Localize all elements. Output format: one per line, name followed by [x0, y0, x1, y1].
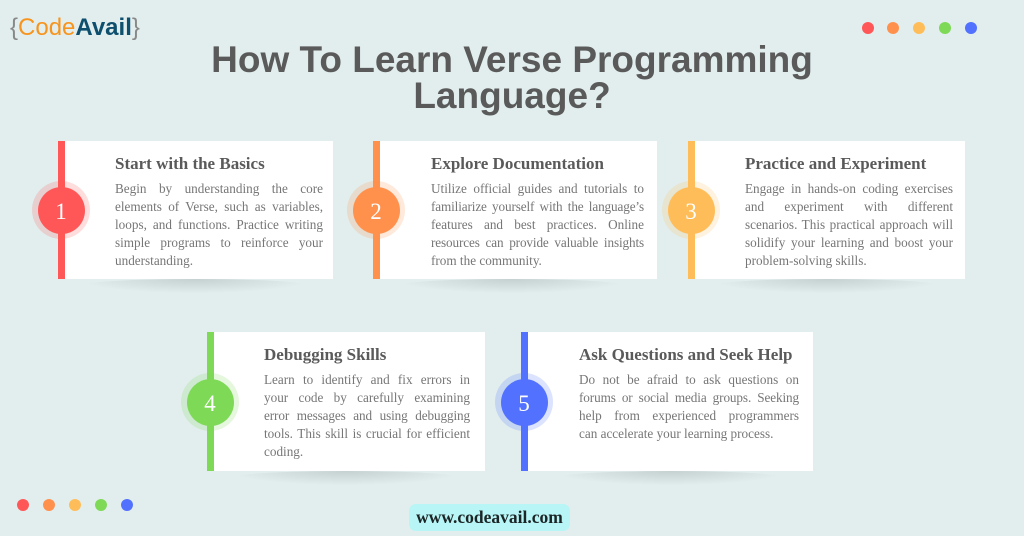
text: Utilize official guides and tutorials to	[431, 181, 644, 196]
heading: Start with the Basics	[115, 154, 265, 173]
text: can accelerate your learning process.	[579, 426, 773, 441]
number 5: 5	[518, 390, 530, 416]
decorative dots: top right	[862, 22, 977, 34]
number 5	[500, 378, 548, 426]
number 4: 4	[204, 390, 216, 416]
title	[211, 39, 813, 116]
decorative dots: bottom left	[17, 499, 133, 511]
heading: Practice and Experiment	[745, 154, 926, 173]
number 3: 3	[685, 198, 697, 224]
text: coding.	[264, 444, 303, 459]
text: familiarize yourself with the language’s	[431, 199, 644, 214]
text: your code by carefully examining	[264, 390, 470, 405]
text: Do not be afraid to ask questions on	[579, 372, 799, 387]
text	[264, 372, 470, 459]
text: Learn to identify and fix errors in	[264, 372, 470, 387]
text: forums or social media groups. Seeking	[579, 390, 799, 405]
text: help from experienced programmers	[579, 408, 799, 423]
text: from the community.	[431, 253, 542, 268]
website badge: www.codeavail.com	[416, 507, 563, 527]
text: elements of Verse, such as variables,	[115, 199, 323, 214]
text	[745, 181, 953, 268]
text: features and best practices. Online	[431, 217, 644, 232]
number 1	[38, 186, 84, 234]
heading: Debugging Skills	[264, 345, 386, 364]
panel: step 1	[32, 141, 333, 290]
text: error messages and using debugging	[264, 408, 470, 423]
logo: {CodeAvail}	[10, 14, 140, 41]
text: understanding.	[115, 253, 193, 268]
website badge	[409, 504, 570, 531]
panel: step 5	[495, 332, 813, 482]
panel: step 3	[662, 141, 965, 290]
number 3	[668, 186, 714, 234]
title: How To Learn Verse Programming	[211, 39, 813, 80]
panel: step 2	[347, 141, 657, 290]
text: solidify your learning and boost your	[745, 235, 953, 250]
text: loops, and functions. Practice writing	[115, 217, 323, 232]
panel: step 4	[181, 332, 485, 482]
text	[115, 181, 323, 268]
text: simple programs to reinforce your	[115, 235, 323, 250]
text: tools. This skill is crucial for efficient	[264, 426, 470, 441]
number 2: 2	[370, 198, 382, 224]
text: Engage in hands-on coding exercises	[745, 181, 953, 196]
number 4	[186, 378, 234, 426]
text: resources can provide valuable insights	[431, 235, 644, 250]
heading: Ask Questions and Seek Help	[579, 345, 792, 364]
heading: Explore Documentation	[431, 154, 604, 173]
title: Language?	[413, 75, 611, 116]
text: and experiment with different	[745, 199, 953, 214]
text	[579, 372, 799, 441]
number 1: 1	[55, 198, 67, 224]
text	[431, 181, 644, 268]
text: Begin by understanding the core	[115, 181, 323, 196]
number 2	[352, 186, 400, 234]
text: scenarios. This practical approach will	[745, 217, 953, 232]
text: problem-solving skills.	[745, 253, 867, 268]
